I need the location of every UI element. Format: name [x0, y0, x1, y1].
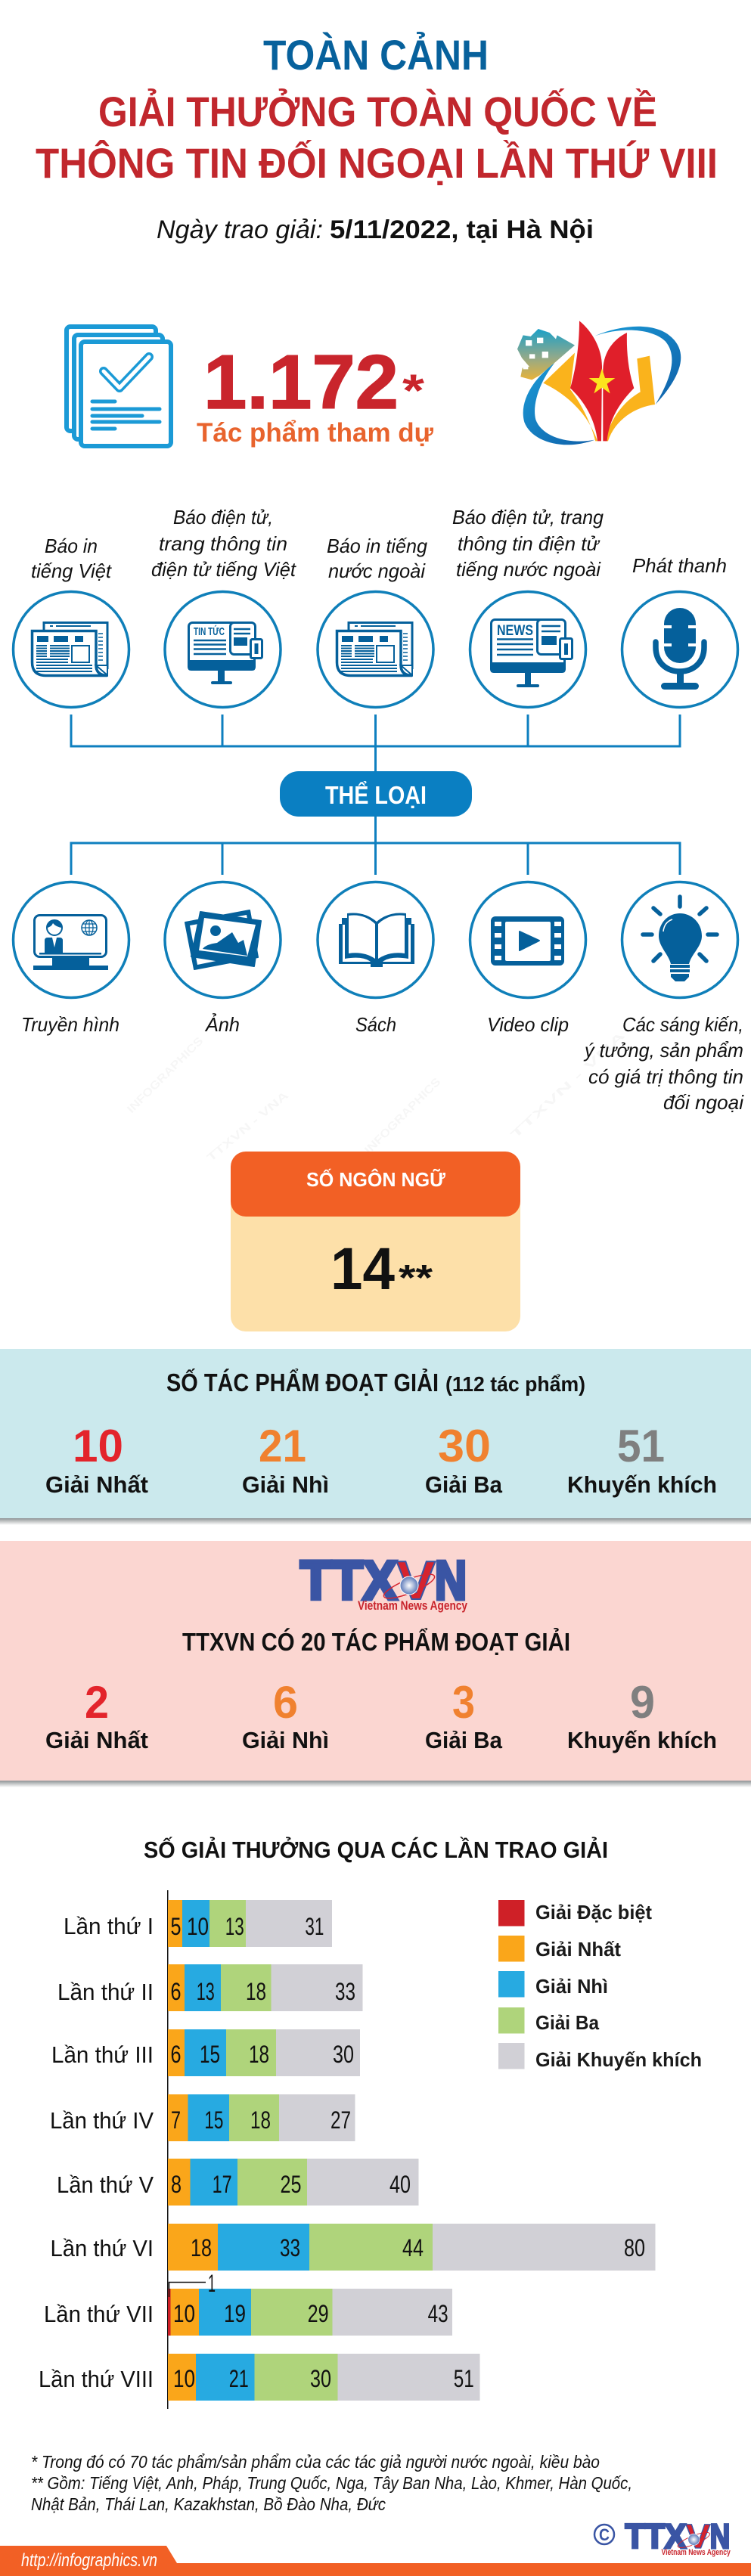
stat: entries submitted: 1.172	[203, 340, 399, 425]
icon: computer with NEWS: NEWS	[497, 623, 533, 639]
row: edition IV: 27	[331, 2106, 351, 2134]
row: edition I	[64, 1900, 332, 1947]
row: edition I: 5	[171, 1913, 182, 1940]
panel: winning works	[0, 1349, 751, 1525]
icon: light bulb	[622, 882, 738, 998]
label: print Vietnamese	[31, 535, 113, 582]
row: edition II: 18	[246, 1978, 266, 2005]
logo: copyright TTXVN: C	[599, 2525, 610, 2544]
stat: entries submitted: *	[402, 365, 425, 416]
label: initiatives: đối ngoại	[663, 1091, 744, 1114]
stat: third prize	[425, 1677, 503, 1753]
heading: VNA winning works: TTXVN CÓ 20 TÁC PHẨM ĐOẠT GIẢI	[182, 1628, 570, 1656]
stat: 14 languages: 14	[331, 1235, 395, 1302]
row: edition V	[57, 2159, 419, 2206]
row: edition I: 31	[305, 1913, 324, 1940]
row: edition III: Lần thứ III	[51, 2041, 154, 2068]
row: edition II: 33	[335, 1978, 355, 2005]
logo: copyright TTXVN: V	[686, 2517, 710, 2556]
logo: TTXVN: V	[396, 1551, 436, 1611]
logo: copyright TTXVN: TTX	[625, 2517, 686, 2556]
panel: VNA winning works	[0, 1541, 751, 1787]
footer band	[0, 2546, 751, 2576]
icon: photographs	[165, 882, 281, 998]
row: edition VIII: 10	[173, 2365, 195, 2392]
connector: media to genres	[70, 715, 681, 875]
row: edition I: 13	[225, 1913, 244, 1940]
row: edition I: 10	[187, 1913, 209, 1940]
award date subtitle: 5/11/2022, tại Hà Nội	[330, 215, 594, 244]
label: print foreign language: nước ngoài	[328, 560, 426, 582]
footnotes: Nhật Bản, Thái Lan, Kazakhstan, Bồ Đào Nha, Đức	[31, 2494, 386, 2514]
heading: languages: SỐ NGÔN NGỮ	[306, 1168, 445, 1191]
row: edition VI: Lần thứ VI	[50, 2235, 154, 2261]
row: edition VII: 10	[173, 2300, 195, 2327]
footnotes: ** Gồm: Tiếng Việt, Anh, Pháp, Trung Quốc, Nga, Tây Ban Nha, Lào, Khmer, Hàn Quốc,	[31, 2473, 632, 2493]
logo: TTXVN	[300, 1551, 467, 1613]
label: online foreign language	[452, 506, 604, 581]
stat: third prize: 30	[438, 1421, 491, 1471]
stat: third prize	[425, 1421, 503, 1498]
icon: document checklist	[67, 327, 171, 446]
watermark: INFOGRAPHICS	[125, 1034, 206, 1116]
label: photo: Ảnh	[204, 1012, 240, 1036]
icon: television	[14, 882, 129, 998]
label: print foreign language	[327, 535, 428, 582]
row: edition III	[51, 2029, 360, 2076]
stat: second prize: Giải Nhì	[242, 1727, 329, 1753]
stat: second prize: 6	[273, 1677, 298, 1728]
label: online Vietnamese: trang thông tin	[159, 532, 287, 555]
row: edition IV: 7	[171, 2106, 181, 2134]
row: edition VIII: Lần thứ VIII	[39, 2366, 154, 2392]
row: edition VI	[50, 2224, 655, 2271]
stat: first prize	[45, 1421, 148, 1498]
row: edition IV: Lần thứ IV	[50, 2107, 154, 2134]
heading: awards chart: SỐ GIẢI THƯỞNG QUA CÁC LẦN TRAO GIẢI	[144, 1836, 608, 1863]
stat: consolation prize: Khuyến khích	[567, 1727, 717, 1753]
row: edition V: 25	[280, 2171, 301, 2198]
row: edition III: 6	[171, 2041, 182, 2068]
legend: Giải Đặc biệt	[535, 1901, 652, 1923]
row: edition V: 40	[389, 2171, 411, 2198]
row: edition III: 30	[333, 2041, 354, 2068]
label: initiatives: ý tưởng, sản phẩm	[583, 1039, 743, 1062]
stat: first prize: Giải Nhất	[45, 1471, 148, 1498]
label: print Vietnamese: Báo in	[45, 535, 98, 557]
legend: Giải Khuyến khích	[535, 2048, 702, 2071]
label: initiatives: có giá trị thông tin	[588, 1065, 743, 1088]
label: online foreign language: tiếng nước ngoài	[456, 558, 601, 581]
row: edition I: Lần thứ I	[64, 1913, 154, 1939]
row: edition V: 8	[171, 2171, 182, 2198]
callout: one special prize: 1	[208, 2270, 216, 2297]
heading: winning works: SỐ TÁC PHẨM ĐOẠT GIẢI	[166, 1368, 439, 1396]
row: edition IV	[50, 2094, 355, 2141]
label: print foreign language: Báo in tiếng	[327, 535, 428, 557]
row: edition V: Lần thứ V	[57, 2171, 154, 2198]
heading: winning works: (112 tác phẩm)	[445, 1372, 585, 1396]
bar chart: awards per edition	[39, 1890, 655, 2409]
row: edition IV: 18	[250, 2106, 271, 2134]
title: TOÀN CẢNH	[263, 31, 489, 79]
award date subtitle	[157, 215, 594, 244]
row: edition VII: 19	[224, 2300, 246, 2327]
row: edition VII: Lần thứ VII	[44, 2301, 154, 2327]
icon: newspaper two	[318, 591, 433, 708]
icon: video clip	[470, 882, 585, 998]
label: radio: Phát thanh	[632, 554, 727, 577]
row: edition IV: 15	[204, 2106, 223, 2134]
label: online foreign language: Báo điện tử, trang	[452, 506, 604, 529]
legend: Giải Ba	[535, 2011, 600, 2034]
label: initiatives: Các sáng kiến,	[622, 1013, 743, 1036]
row: edition VII: 43	[428, 2300, 448, 2327]
label: print Vietnamese: tiếng Việt	[31, 560, 113, 582]
row: edition VIII: 30	[310, 2365, 331, 2392]
logo: TTXVN: TTX	[300, 1551, 397, 1611]
row: edition VI: 33	[280, 2234, 300, 2261]
watermark	[125, 1029, 628, 1164]
label: initiatives	[583, 1013, 744, 1114]
logo: copyright TTXVN: Vietnam News Agency	[661, 2548, 731, 2557]
stat: consolation prize: 51	[617, 1421, 665, 1471]
row: edition II: 13	[197, 1978, 215, 2005]
stat: third prize: Giải Ba	[425, 1471, 503, 1498]
stat: third prize: 3	[452, 1677, 475, 1728]
icon: award logo	[517, 321, 681, 445]
label: online Vietnamese: điện tử tiếng Việt	[151, 558, 297, 581]
watermark: TTXVN - VNA	[508, 1029, 628, 1142]
stat: entries submitted	[197, 340, 434, 448]
logo: copyright TTXVN	[594, 2517, 731, 2557]
stat: consolation prize: Khuyến khích	[567, 1471, 717, 1498]
stat: second prize	[242, 1421, 329, 1498]
logo: TTXVN: N	[435, 1551, 467, 1611]
label: television: Truyền hình	[21, 1013, 119, 1036]
stat: 14 languages: **	[399, 1258, 433, 1298]
row: edition VII	[44, 2270, 452, 2336]
stat: first prize: Giải Nhất	[45, 1727, 148, 1753]
stat: entries submitted: Tác phẩm tham dự	[197, 418, 434, 448]
row: edition VIII	[39, 2354, 479, 2401]
watermark: INFOGRAPHICS	[362, 1075, 443, 1157]
row: edition V: 17	[213, 2171, 232, 2198]
row: edition VIII: 51	[454, 2365, 474, 2392]
stat: consolation prize	[567, 1421, 717, 1498]
stat: first prize: 2	[85, 1677, 109, 1728]
stat: third prize: Giải Ba	[425, 1727, 503, 1753]
icon: newspaper one	[14, 591, 129, 708]
label: book: Sách	[355, 1013, 396, 1036]
legend	[498, 1900, 702, 2071]
stat: second prize: Giải Nhì	[242, 1471, 329, 1498]
row: edition II: Lần thứ II	[57, 1979, 154, 2005]
row: edition III: 15	[200, 2041, 220, 2068]
label: online Vietnamese	[151, 506, 297, 581]
panel: genres	[14, 882, 744, 1114]
logo: TTXVN: Vietnam News Agency	[358, 1598, 467, 1613]
title: GIẢI THƯỞNG TOÀN QUỐC VỀ	[98, 88, 657, 135]
icon: computer with TIN TỨC	[165, 591, 281, 708]
logo: copyright TTXVN: N	[710, 2517, 730, 2556]
row: edition VI: 44	[402, 2234, 424, 2261]
panel: media categories	[14, 506, 738, 708]
row: edition VII: 29	[308, 2300, 329, 2327]
row: edition VIII: 21	[229, 2365, 249, 2392]
stat: consolation prize: 9	[630, 1677, 655, 1728]
callout: one special prize	[169, 2270, 216, 2297]
title	[36, 31, 718, 187]
footnotes: * Trong đó có 70 tác phẩm/sản phẩm của các tác giả người nước ngoài, kiều bào	[31, 2452, 600, 2472]
stat: consolation prize	[567, 1677, 717, 1753]
icon: computer with NEWS	[470, 591, 585, 708]
legend: Giải Nhất	[535, 1938, 621, 1961]
stat: first prize	[45, 1677, 148, 1753]
stat: first prize: 10	[73, 1421, 123, 1471]
row: edition II: 6	[171, 1978, 182, 2005]
row: edition VI: 18	[191, 2234, 212, 2261]
stat: second prize	[242, 1677, 329, 1753]
label: online foreign language: thông tin điện tử	[458, 532, 600, 555]
icon: microphone	[622, 591, 738, 708]
button: THỂ LOẠI	[280, 771, 472, 817]
icon: computer with TIN TỨC: TIN TỨC	[194, 625, 225, 638]
panel: number of languages	[231, 1152, 520, 1331]
footnotes	[31, 2452, 632, 2514]
award date subtitle: Ngày trao giải:	[157, 215, 323, 244]
watermark: TTXVN - VNA	[205, 1089, 291, 1164]
label: online Vietnamese: Báo điện tử,	[173, 506, 273, 529]
stat: second prize: 21	[259, 1421, 306, 1471]
icon: open book	[318, 882, 433, 998]
label: video clip: Video clip	[487, 1013, 569, 1036]
stat: 14 languages	[331, 1235, 433, 1302]
button: THỂ LOẠI: THỂ LOẠI	[325, 781, 427, 809]
footer band: http://infographics.vn	[21, 2550, 157, 2571]
row: edition VI: 80	[624, 2234, 645, 2261]
row: edition II	[57, 1964, 363, 2011]
legend: Giải Nhì	[535, 1975, 608, 1998]
row: edition III: 18	[249, 2041, 269, 2068]
